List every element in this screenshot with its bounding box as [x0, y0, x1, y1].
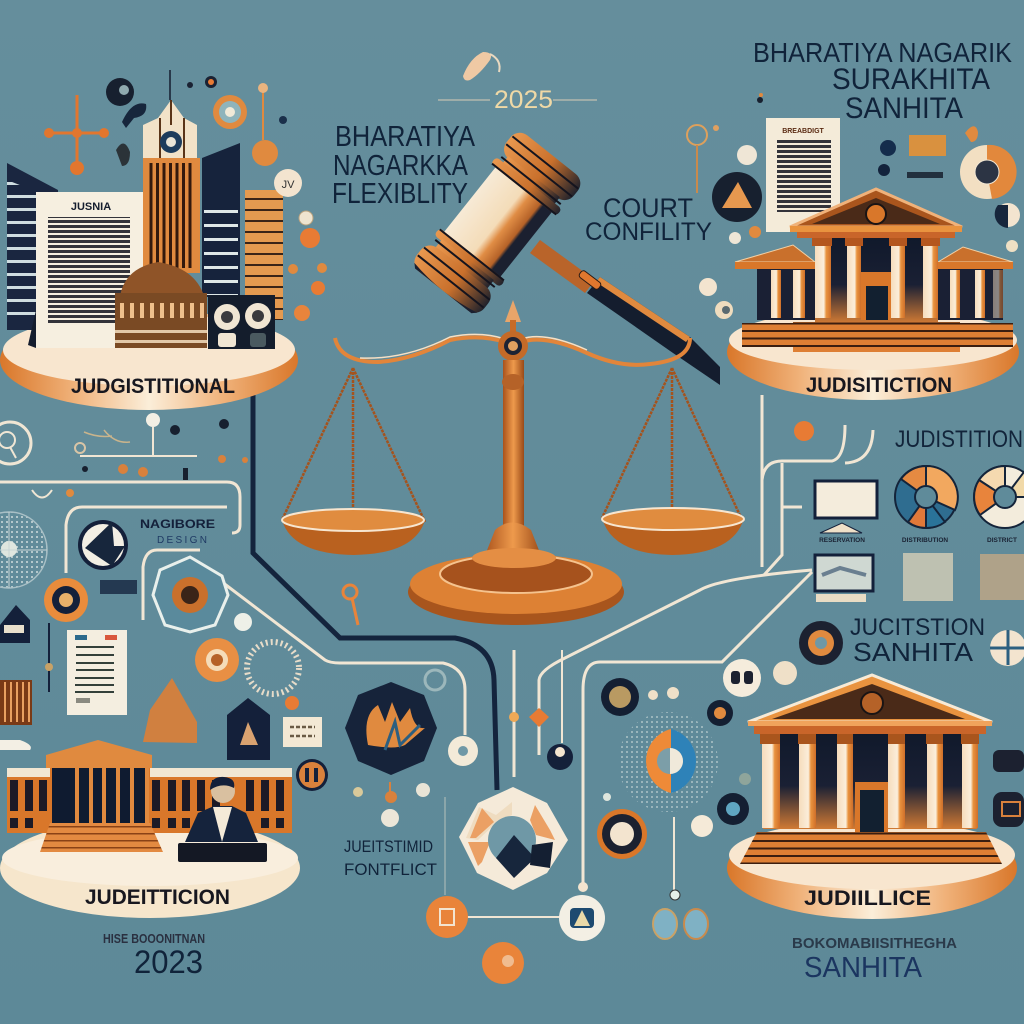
document [903, 553, 953, 601]
chart captions [819, 537, 1017, 544]
label: JUDEITTICION [85, 886, 230, 909]
monitor bottom [815, 555, 873, 602]
donut chart 2 [974, 466, 1024, 528]
small icons top-left: JV [282, 179, 295, 191]
chart: orange and blue donut [618, 712, 718, 812]
top year text: 2025 [494, 86, 553, 114]
lower left caption: HISE BOOONITNAN [103, 931, 205, 946]
small icons top-left [44, 76, 327, 321]
label: JUDGISTITIONAL [71, 375, 235, 398]
document top-right: BREABDIGT [782, 128, 825, 135]
icon: scales of justice [282, 300, 744, 625]
panel: left small icons: NAGIBORE [140, 517, 215, 531]
heading: center left: BHARATIYA [335, 121, 476, 153]
panel: lower right courthouse [727, 675, 1017, 919]
small icons lower right [597, 621, 1024, 939]
document lower left [67, 630, 127, 715]
heading: lower right [850, 614, 985, 667]
heading: center left: FLEXIBLITY [332, 178, 468, 210]
heading: center left [332, 121, 476, 210]
chart: segmented octagon [459, 787, 568, 890]
chart captions: DISTRICT [987, 537, 1017, 544]
lower left caption [103, 931, 205, 980]
panel: left small icons [0, 413, 358, 750]
chart captions: RESERVATION [819, 537, 865, 544]
heading: top right: SURAKHITA [832, 63, 990, 96]
chart captions: DISTRIBUTION [902, 537, 948, 544]
panel: right charts [815, 426, 1024, 602]
label: JUDIILLICE [804, 887, 931, 910]
domed building [115, 262, 207, 348]
courthouse [735, 189, 1013, 352]
heading: court conflicity: CONFILITY [585, 218, 712, 246]
document: JUSNIA [71, 201, 111, 213]
lower right caption [792, 935, 957, 984]
dark connector [253, 395, 497, 790]
small icons top-right [687, 93, 1020, 441]
donut chart 1 [895, 466, 958, 528]
heading: lower right: SANHITA [853, 637, 974, 667]
courthouse [7, 740, 292, 852]
panel: left small icons: DESIGN [157, 535, 207, 546]
heading: court conflicity [585, 193, 712, 246]
image tile [980, 554, 1024, 600]
top year text [438, 52, 597, 114]
label: JUDISITICTION [806, 374, 952, 397]
heading: lower right: JUCITSTION [850, 614, 985, 641]
small icons lower left [143, 670, 573, 827]
lower left caption: 2023 [134, 944, 203, 980]
icon: gavel [410, 128, 720, 385]
panel: top-right courthouse [727, 189, 1019, 400]
heading: top right [753, 37, 1012, 125]
buildings [7, 70, 283, 330]
heading: court conflicity: COURT [603, 193, 693, 223]
platform [727, 304, 1019, 400]
center-bottom text [344, 837, 437, 879]
document [28, 192, 143, 348]
panel: top-left city [0, 70, 298, 410]
document top-right [766, 118, 840, 232]
connector lines [0, 395, 873, 917]
icon: dark octagon with flame [345, 682, 437, 775]
heading: top right: SANHITA [845, 92, 963, 125]
lower right caption: SANHITA [804, 952, 923, 984]
bottom nodes [426, 882, 605, 984]
center-bottom text: JUEITSTIMID [344, 837, 433, 856]
platform [0, 310, 298, 410]
platform [727, 817, 1017, 919]
panel: lower left courthouse [0, 740, 300, 918]
platform [0, 818, 300, 918]
figure: judge at desk [178, 777, 267, 862]
center-bottom text: FONTFLICT [344, 860, 437, 879]
heading: center left: NAGARKKA [333, 150, 469, 182]
monitor top [815, 481, 877, 533]
courthouse [740, 675, 1002, 864]
icon: speakers [208, 295, 275, 349]
lower right caption: BOKOMABIISITHEGHA [792, 935, 957, 952]
